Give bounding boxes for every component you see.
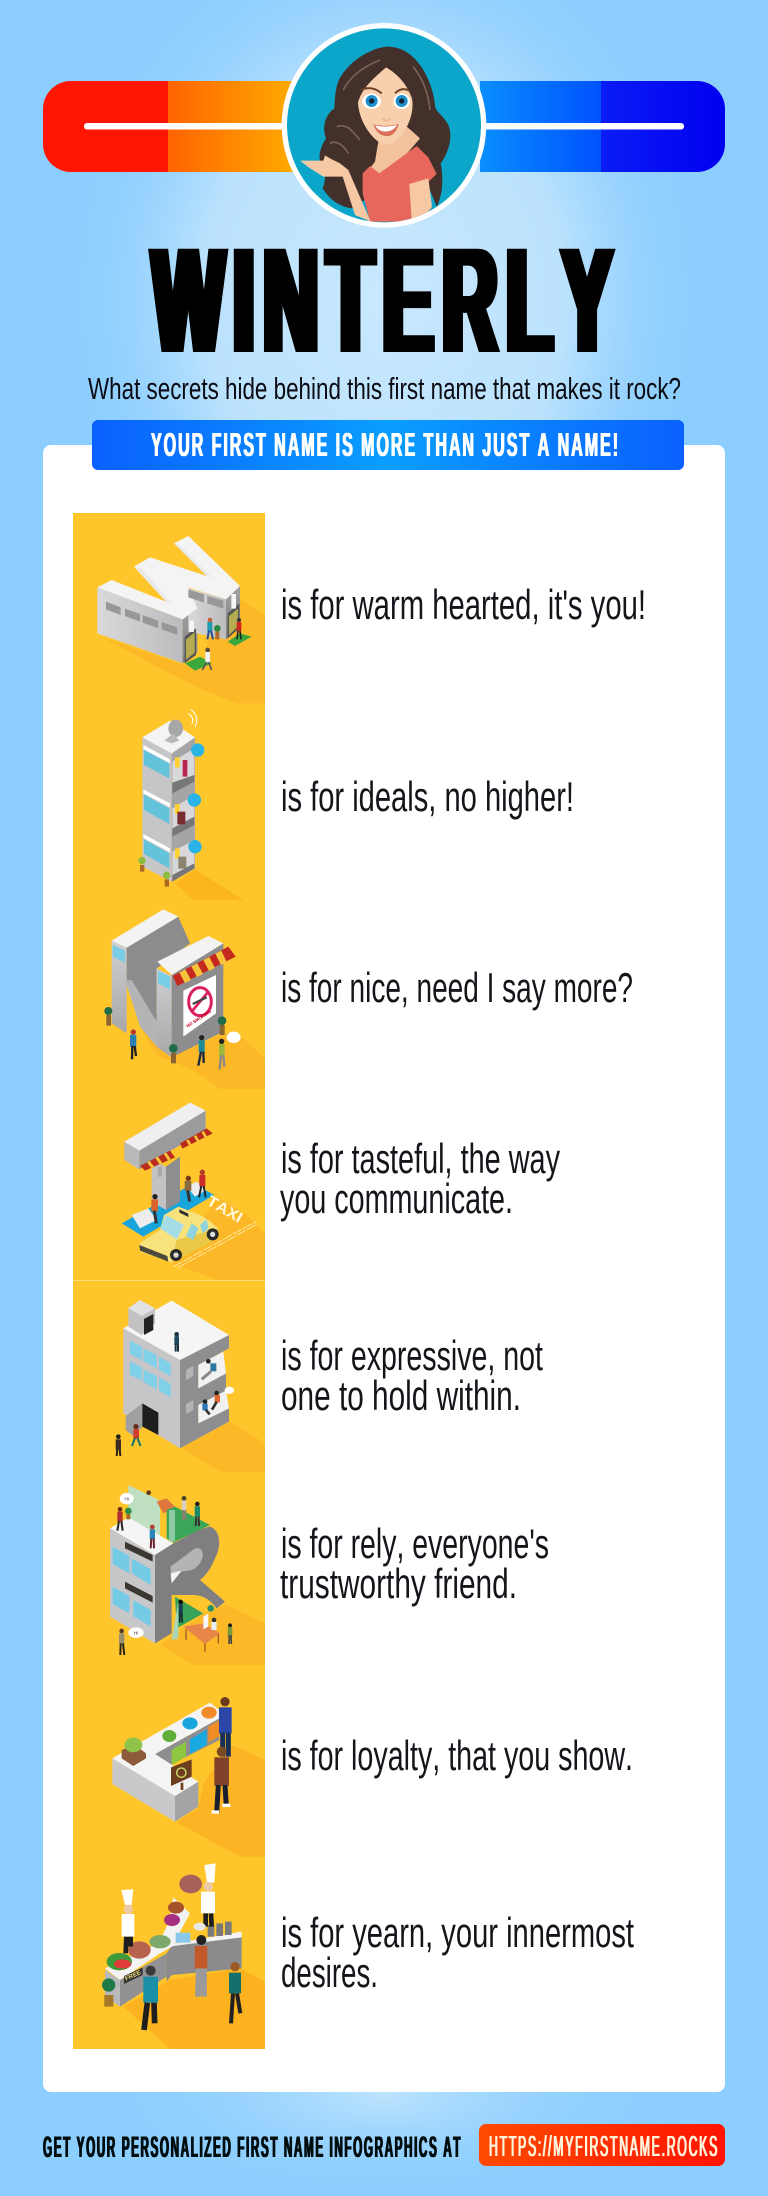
bench and passengers bbox=[132, 1170, 207, 1228]
recycling bins bbox=[162, 1707, 219, 1765]
shadow: W bbox=[102, 600, 265, 703]
desk in R bbox=[183, 1605, 220, 1652]
illustrations, clipped to column bbox=[73, 536, 265, 2049]
line: Y bbox=[281, 1909, 634, 1996]
line: Y: desires. bbox=[281, 1949, 378, 1996]
face bbox=[358, 67, 413, 145]
letter descriptions bbox=[280, 581, 646, 1996]
line: E bbox=[281, 1332, 543, 1419]
letter N building bbox=[112, 909, 223, 1057]
people at E bbox=[116, 1332, 234, 1456]
no smoking sign bbox=[183, 975, 216, 1037]
white content panel bbox=[43, 445, 725, 2092]
W and I illustrations bbox=[97, 536, 265, 900]
chefs and guests bbox=[102, 1863, 241, 2030]
line: R: trustworthy friend. bbox=[280, 1560, 517, 1607]
hair bbox=[319, 47, 450, 208]
lettuce crate bbox=[122, 1738, 146, 1766]
letter Y buffet bbox=[105, 1897, 242, 2007]
plants at I bbox=[138, 857, 170, 887]
line: I: is for ideals, no higher! bbox=[281, 773, 574, 820]
people and plants at N bbox=[104, 1007, 241, 1069]
banner bbox=[92, 420, 684, 470]
satellite dish bbox=[164, 709, 197, 743]
taxi ground lettering bbox=[173, 1193, 257, 1268]
E and R illustrations bbox=[110, 1300, 265, 1665]
taxi ground lettering: TAXI bbox=[204, 1193, 245, 1227]
no smoking sign: NO SMOKING bbox=[185, 1009, 213, 1029]
letter R building bbox=[110, 1485, 225, 1643]
portrait medallion bbox=[282, 23, 486, 228]
T awnings bbox=[140, 1128, 213, 1171]
striped awning bbox=[173, 947, 236, 986]
letter W building bbox=[97, 536, 252, 671]
greeting bubbles: Hi bbox=[124, 1496, 129, 1501]
hand and arm bbox=[300, 155, 371, 222]
smile bbox=[373, 124, 399, 136]
status bubbles bbox=[188, 743, 204, 853]
blue taxi stand bbox=[122, 1183, 214, 1237]
shadow: T bbox=[173, 1197, 265, 1280]
header bar bbox=[43, 81, 725, 172]
letter I building bbox=[142, 721, 195, 882]
shadow: Y bbox=[123, 1968, 265, 2049]
people at R bbox=[117, 1490, 232, 1655]
shadow: L bbox=[177, 1745, 265, 1857]
line: E: is for expressive, not bbox=[281, 1332, 543, 1379]
letter L counter bbox=[112, 1703, 219, 1822]
taxi car bbox=[139, 1207, 219, 1263]
line: T: is for tasteful, the way bbox=[281, 1135, 560, 1182]
greeting bubbles: Hi bbox=[134, 1630, 138, 1635]
neck and chest bbox=[371, 127, 420, 174]
yellow illustration column bbox=[73, 513, 265, 2049]
shadow: I bbox=[175, 869, 243, 900]
footer url button bbox=[479, 2124, 725, 2166]
line: R bbox=[280, 1520, 549, 1607]
shadow: N bbox=[140, 1027, 265, 1089]
line: T bbox=[280, 1135, 560, 1222]
people at L bbox=[212, 1697, 232, 1813]
line: T: you communicate. bbox=[280, 1175, 513, 1222]
L and Y illustrations bbox=[102, 1697, 265, 2049]
people at W bbox=[202, 618, 241, 670]
shirt bbox=[363, 146, 437, 222]
line: E: one to hold within. bbox=[281, 1372, 521, 1419]
shadow: R bbox=[160, 1605, 265, 1665]
letter E building bbox=[123, 1300, 229, 1448]
eyes bbox=[362, 94, 381, 109]
greeting bubbles bbox=[120, 1493, 144, 1638]
shadow: E bbox=[182, 1422, 265, 1472]
N and T illustrations bbox=[73, 909, 265, 1281]
recycling sign bbox=[171, 1759, 192, 1790]
food platters bbox=[107, 1875, 232, 1970]
letter Y buffet: FREE bbox=[124, 1969, 142, 1982]
line: R: is for rely, everyone's bbox=[281, 1520, 549, 1567]
letter T building bbox=[124, 1103, 206, 1210]
